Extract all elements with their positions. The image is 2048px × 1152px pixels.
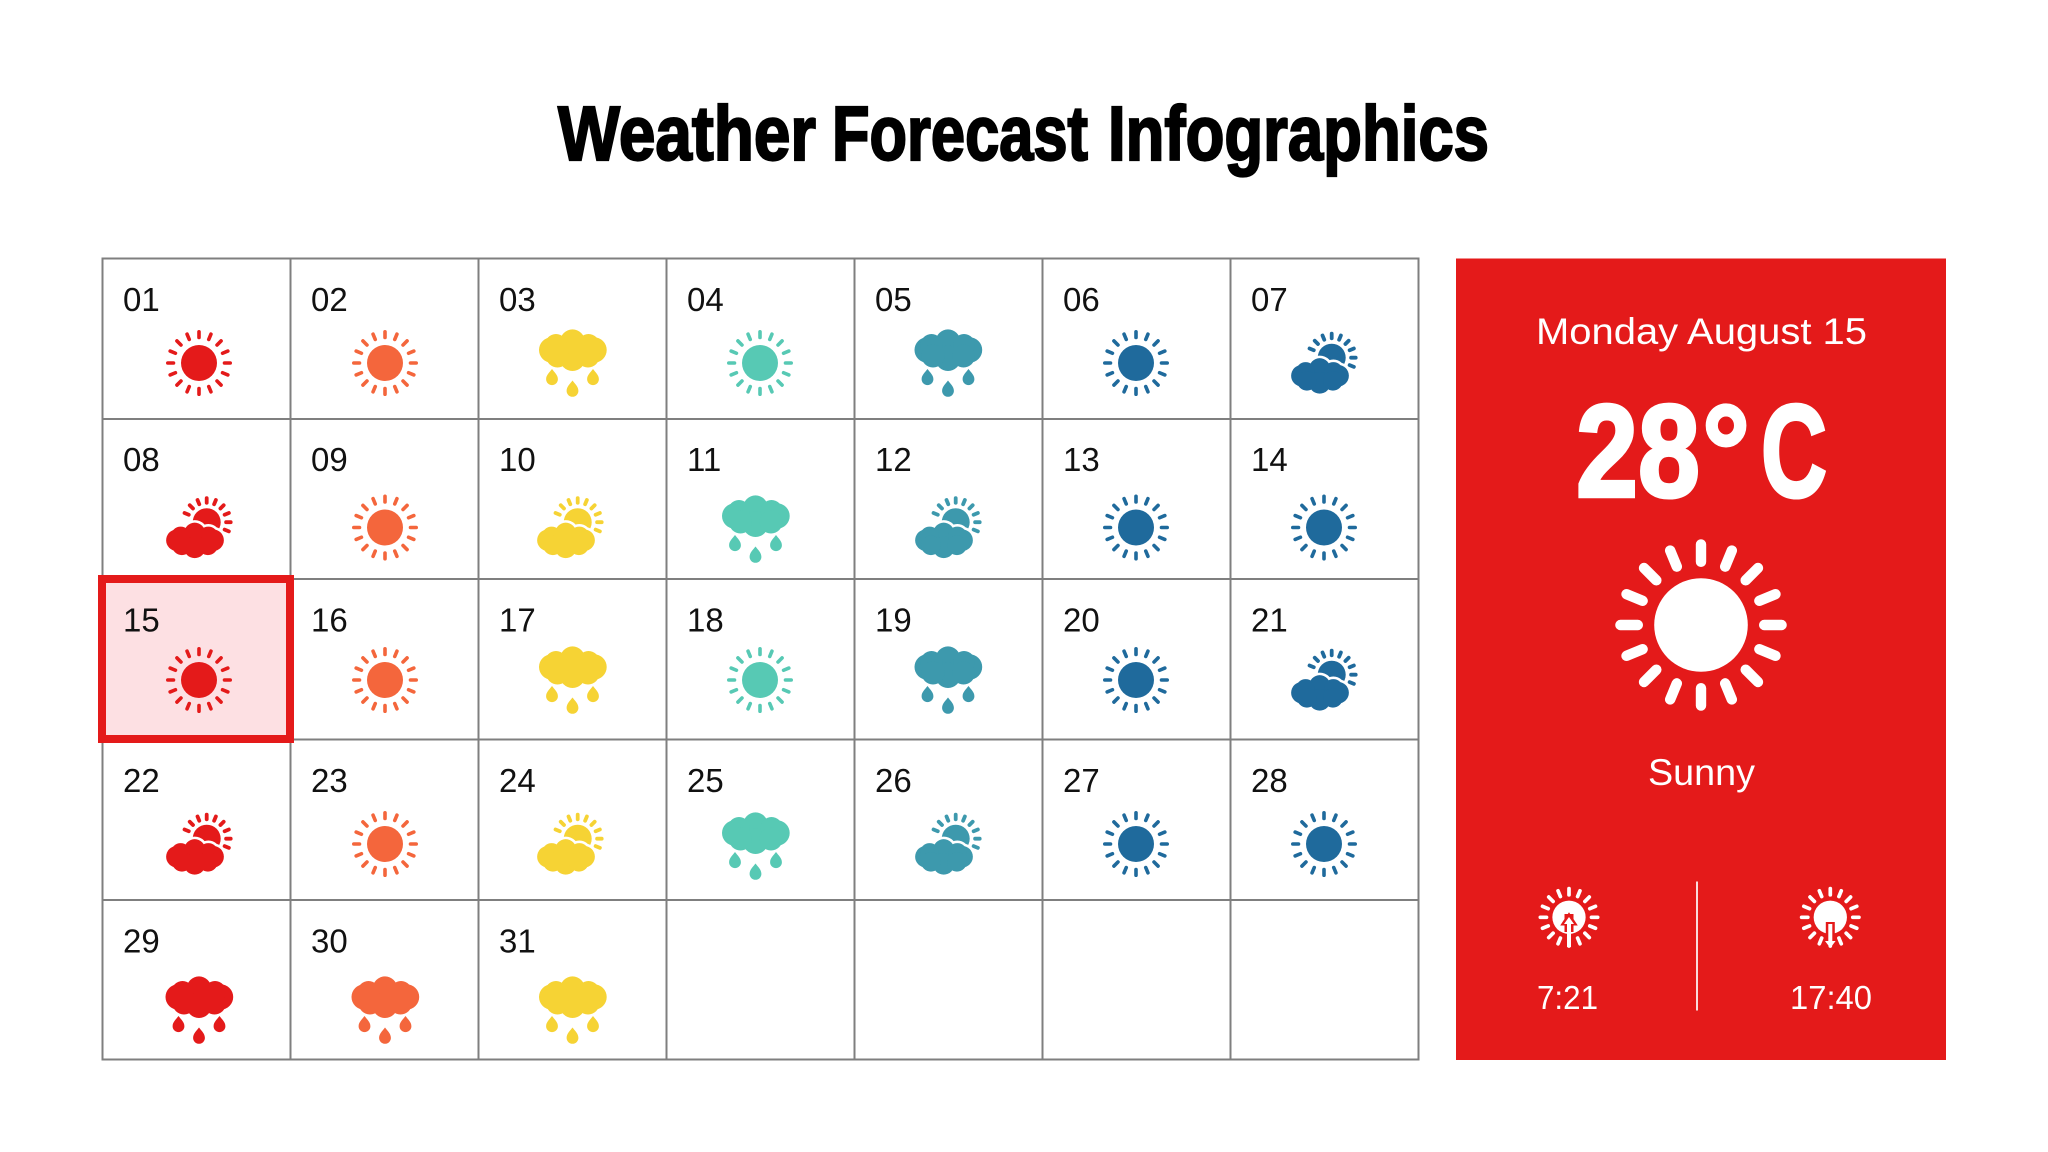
day 13: 13: [1063, 441, 1100, 478]
day 13: [1063, 441, 1167, 559]
day 19: 19: [875, 602, 912, 638]
condition label: Sunny: [1648, 752, 1755, 793]
day 31: [499, 922, 607, 1044]
day 25: 25: [687, 762, 724, 799]
day 03: [499, 281, 607, 397]
day 21: [1251, 602, 1356, 711]
day 23: [311, 762, 416, 875]
day 10: 10: [499, 441, 536, 478]
icon: sunset: [1802, 889, 1859, 948]
day 02: 02: [311, 281, 348, 318]
day 05: [875, 281, 982, 397]
day 04: [687, 281, 791, 394]
day 18: [687, 602, 791, 711]
temperature: C: [1761, 378, 1827, 524]
day 22: 22: [123, 762, 160, 799]
day 06: [1063, 281, 1167, 394]
day 28: 28: [1251, 762, 1288, 799]
day 19: [875, 602, 982, 714]
day 26: [875, 762, 980, 875]
day 08: [123, 441, 231, 558]
day 01: 01: [123, 281, 160, 318]
panel: today's forecast: [1456, 258, 1946, 1060]
row 1 days: [123, 281, 1356, 397]
day 16: [311, 602, 416, 711]
day 06: 06: [1063, 281, 1100, 318]
sunrise time: 7:21: [1537, 979, 1598, 1016]
temperature: [1576, 378, 1827, 525]
day 24: [499, 762, 602, 875]
day 04: 04: [687, 281, 724, 318]
day 30: 30: [311, 922, 348, 960]
day 10: [499, 441, 602, 558]
day 12: [875, 441, 980, 558]
day 05: 05: [875, 281, 912, 318]
day 21: 21: [1251, 602, 1288, 638]
day 24: 24: [499, 762, 536, 799]
day 09: [311, 441, 416, 559]
day 17: [499, 602, 607, 714]
day 02: [311, 281, 416, 394]
title: Forecast: [832, 91, 1088, 177]
day 27: 27: [1063, 762, 1100, 799]
title: Infographics: [1108, 91, 1489, 177]
day 17: 17: [499, 602, 536, 638]
day 20: 20: [1063, 602, 1100, 638]
day 12: 12: [875, 441, 912, 478]
row 3 days: [123, 602, 1356, 714]
sunset time: 17:40: [1790, 979, 1872, 1016]
day 09: 09: [311, 441, 348, 478]
day 11: 11: [687, 441, 721, 478]
day 14: [1251, 441, 1355, 559]
day 11: [687, 441, 790, 563]
day 23: 23: [311, 762, 348, 799]
day 07: 07: [1251, 281, 1288, 318]
day 18: 18: [687, 602, 724, 638]
date: Monday August 15: [1536, 311, 1867, 352]
day 31: 31: [499, 922, 536, 960]
row 5 days: [123, 922, 607, 1044]
panel background: [1456, 258, 1946, 1060]
day 07: [1251, 281, 1356, 394]
divider: [1696, 882, 1698, 1010]
icon: sunrise: [1540, 889, 1598, 947]
row 2 days: [123, 441, 1355, 563]
day 15: 15: [123, 602, 160, 638]
day 20: [1063, 602, 1167, 711]
day 27: [1063, 762, 1167, 875]
day 15: [123, 602, 230, 711]
day 30: [311, 922, 419, 1044]
day 08: 08: [123, 441, 160, 478]
day 16: 16: [311, 602, 348, 638]
day 25: [687, 762, 790, 880]
title: [558, 91, 1489, 177]
highlighted cell: day 15: [102, 579, 290, 739]
temperature: °: [1702, 378, 1750, 525]
icon: large sun: [1620, 544, 1782, 706]
day 26: 26: [875, 762, 912, 799]
row 4 days: [123, 762, 1355, 880]
day 29: [123, 922, 233, 1044]
day 01: [123, 281, 230, 394]
calendar grid: [102, 258, 1418, 1060]
day 03: 03: [499, 281, 536, 318]
temperature: 28: [1576, 378, 1700, 524]
day 28: [1251, 762, 1355, 875]
day 22: [123, 762, 231, 875]
day 14: 14: [1251, 441, 1288, 478]
title: Weather: [558, 91, 816, 177]
day 29: 29: [123, 922, 160, 960]
